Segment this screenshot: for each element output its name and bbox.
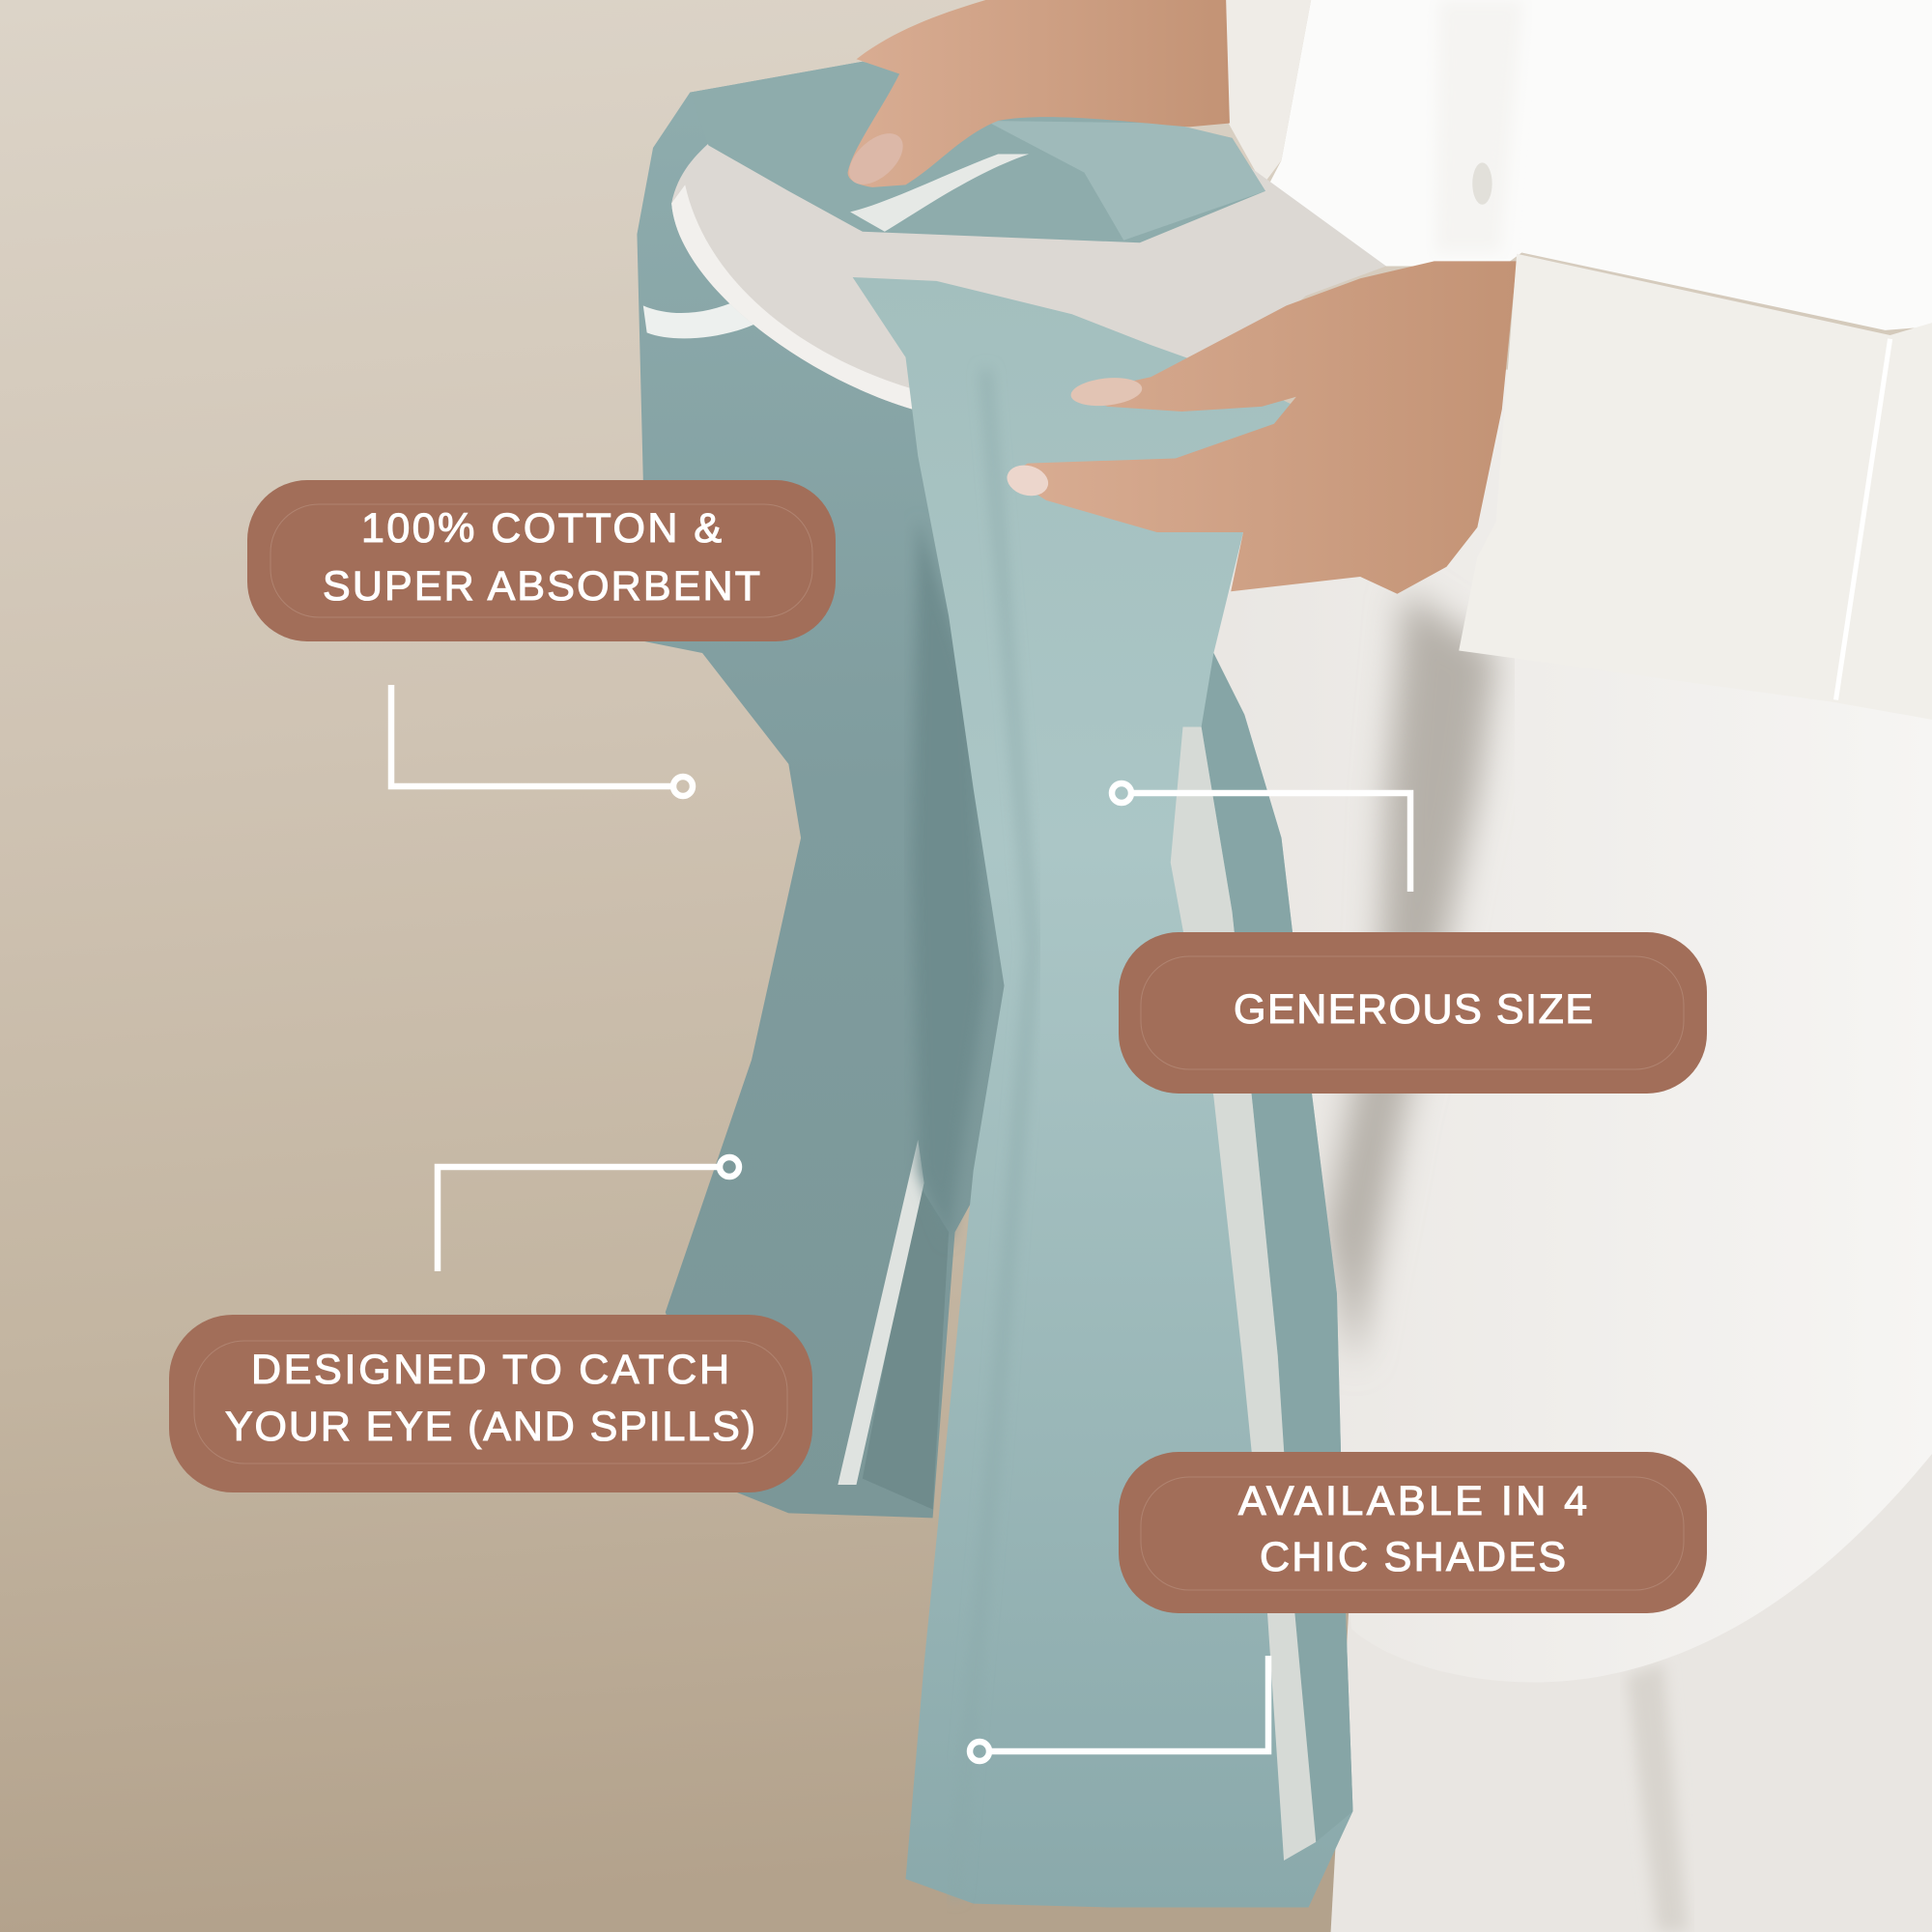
towel front panel — [853, 277, 1353, 1907]
badge text line two: SUPER ABSORBENT — [323, 563, 760, 610]
cuff — [1459, 254, 1932, 720]
trouser leg fold — [1627, 1663, 1688, 1932]
connector: shades badge to towel — [970, 1656, 1268, 1761]
badge text line two: CHIC SHADES — [1260, 1534, 1566, 1580]
badge text line two: YOUR EYE (AND SPILLS) — [225, 1404, 755, 1450]
upper hand fingernail — [839, 124, 912, 194]
towel back, terry side — [637, 62, 1023, 1518]
plate rim — [671, 185, 914, 409]
badge inner outline — [270, 504, 812, 617]
towel front white stripe — [1171, 727, 1316, 1861]
lower hand fingernail one — [1069, 375, 1144, 409]
shirt placket shading — [1435, 0, 1523, 252]
terry towel lower shadow — [863, 1182, 949, 1509]
badge: 100% cotton and super absorbent — [247, 480, 836, 641]
badge: generous size — [1119, 932, 1707, 1094]
lower hand fingernail two — [1004, 461, 1052, 500]
badge shape — [169, 1315, 812, 1492]
badge: available in 4 chic shades — [1119, 1452, 1707, 1613]
badge shape — [247, 480, 836, 641]
badge shape — [1119, 1452, 1707, 1613]
badge text line one: 100% COTTON & — [361, 505, 722, 552]
terry towel lower white stripe — [838, 1140, 924, 1485]
far sleeve — [1226, 0, 1311, 185]
badge: designed to catch your eye — [169, 1315, 812, 1492]
towel front edge seam shadow — [955, 370, 1033, 1897]
top towel fold — [690, 62, 1265, 242]
shirt upper body — [1265, 0, 1932, 330]
lower hand — [1008, 261, 1517, 594]
badge text line one: DESIGNED TO CATCH — [251, 1347, 729, 1393]
trousers — [1331, 1392, 1932, 1932]
upper hand — [848, 0, 1230, 187]
cuff seam — [1836, 339, 1890, 699]
badge inner outline — [194, 1341, 787, 1463]
connector: cotton badge to towel — [391, 685, 693, 796]
terry towel dark fold — [912, 518, 985, 1244]
top fold smooth band — [985, 121, 1265, 241]
badge inner outline — [1141, 1477, 1684, 1590]
shirt button — [1472, 162, 1492, 205]
photo: hands drying a plate with a towel — [637, 0, 1932, 1932]
badge inner outline — [1141, 956, 1684, 1069]
shirt lower body — [1182, 370, 1932, 1682]
connector: size badge to towel — [1112, 783, 1410, 892]
badge text: GENEROUS SIZE — [1234, 986, 1593, 1033]
connector: eye badge to towel — [438, 1157, 739, 1271]
shirt fold shadow — [1324, 591, 1497, 1368]
plate — [671, 138, 1386, 409]
badge text line one: AVAILABLE IN 4 — [1238, 1478, 1587, 1524]
badge shape — [1119, 932, 1707, 1094]
top fold white stripe — [850, 154, 1029, 232]
terry towel white stripe — [643, 299, 757, 338]
towel back panel, darker — [1202, 653, 1353, 1842]
